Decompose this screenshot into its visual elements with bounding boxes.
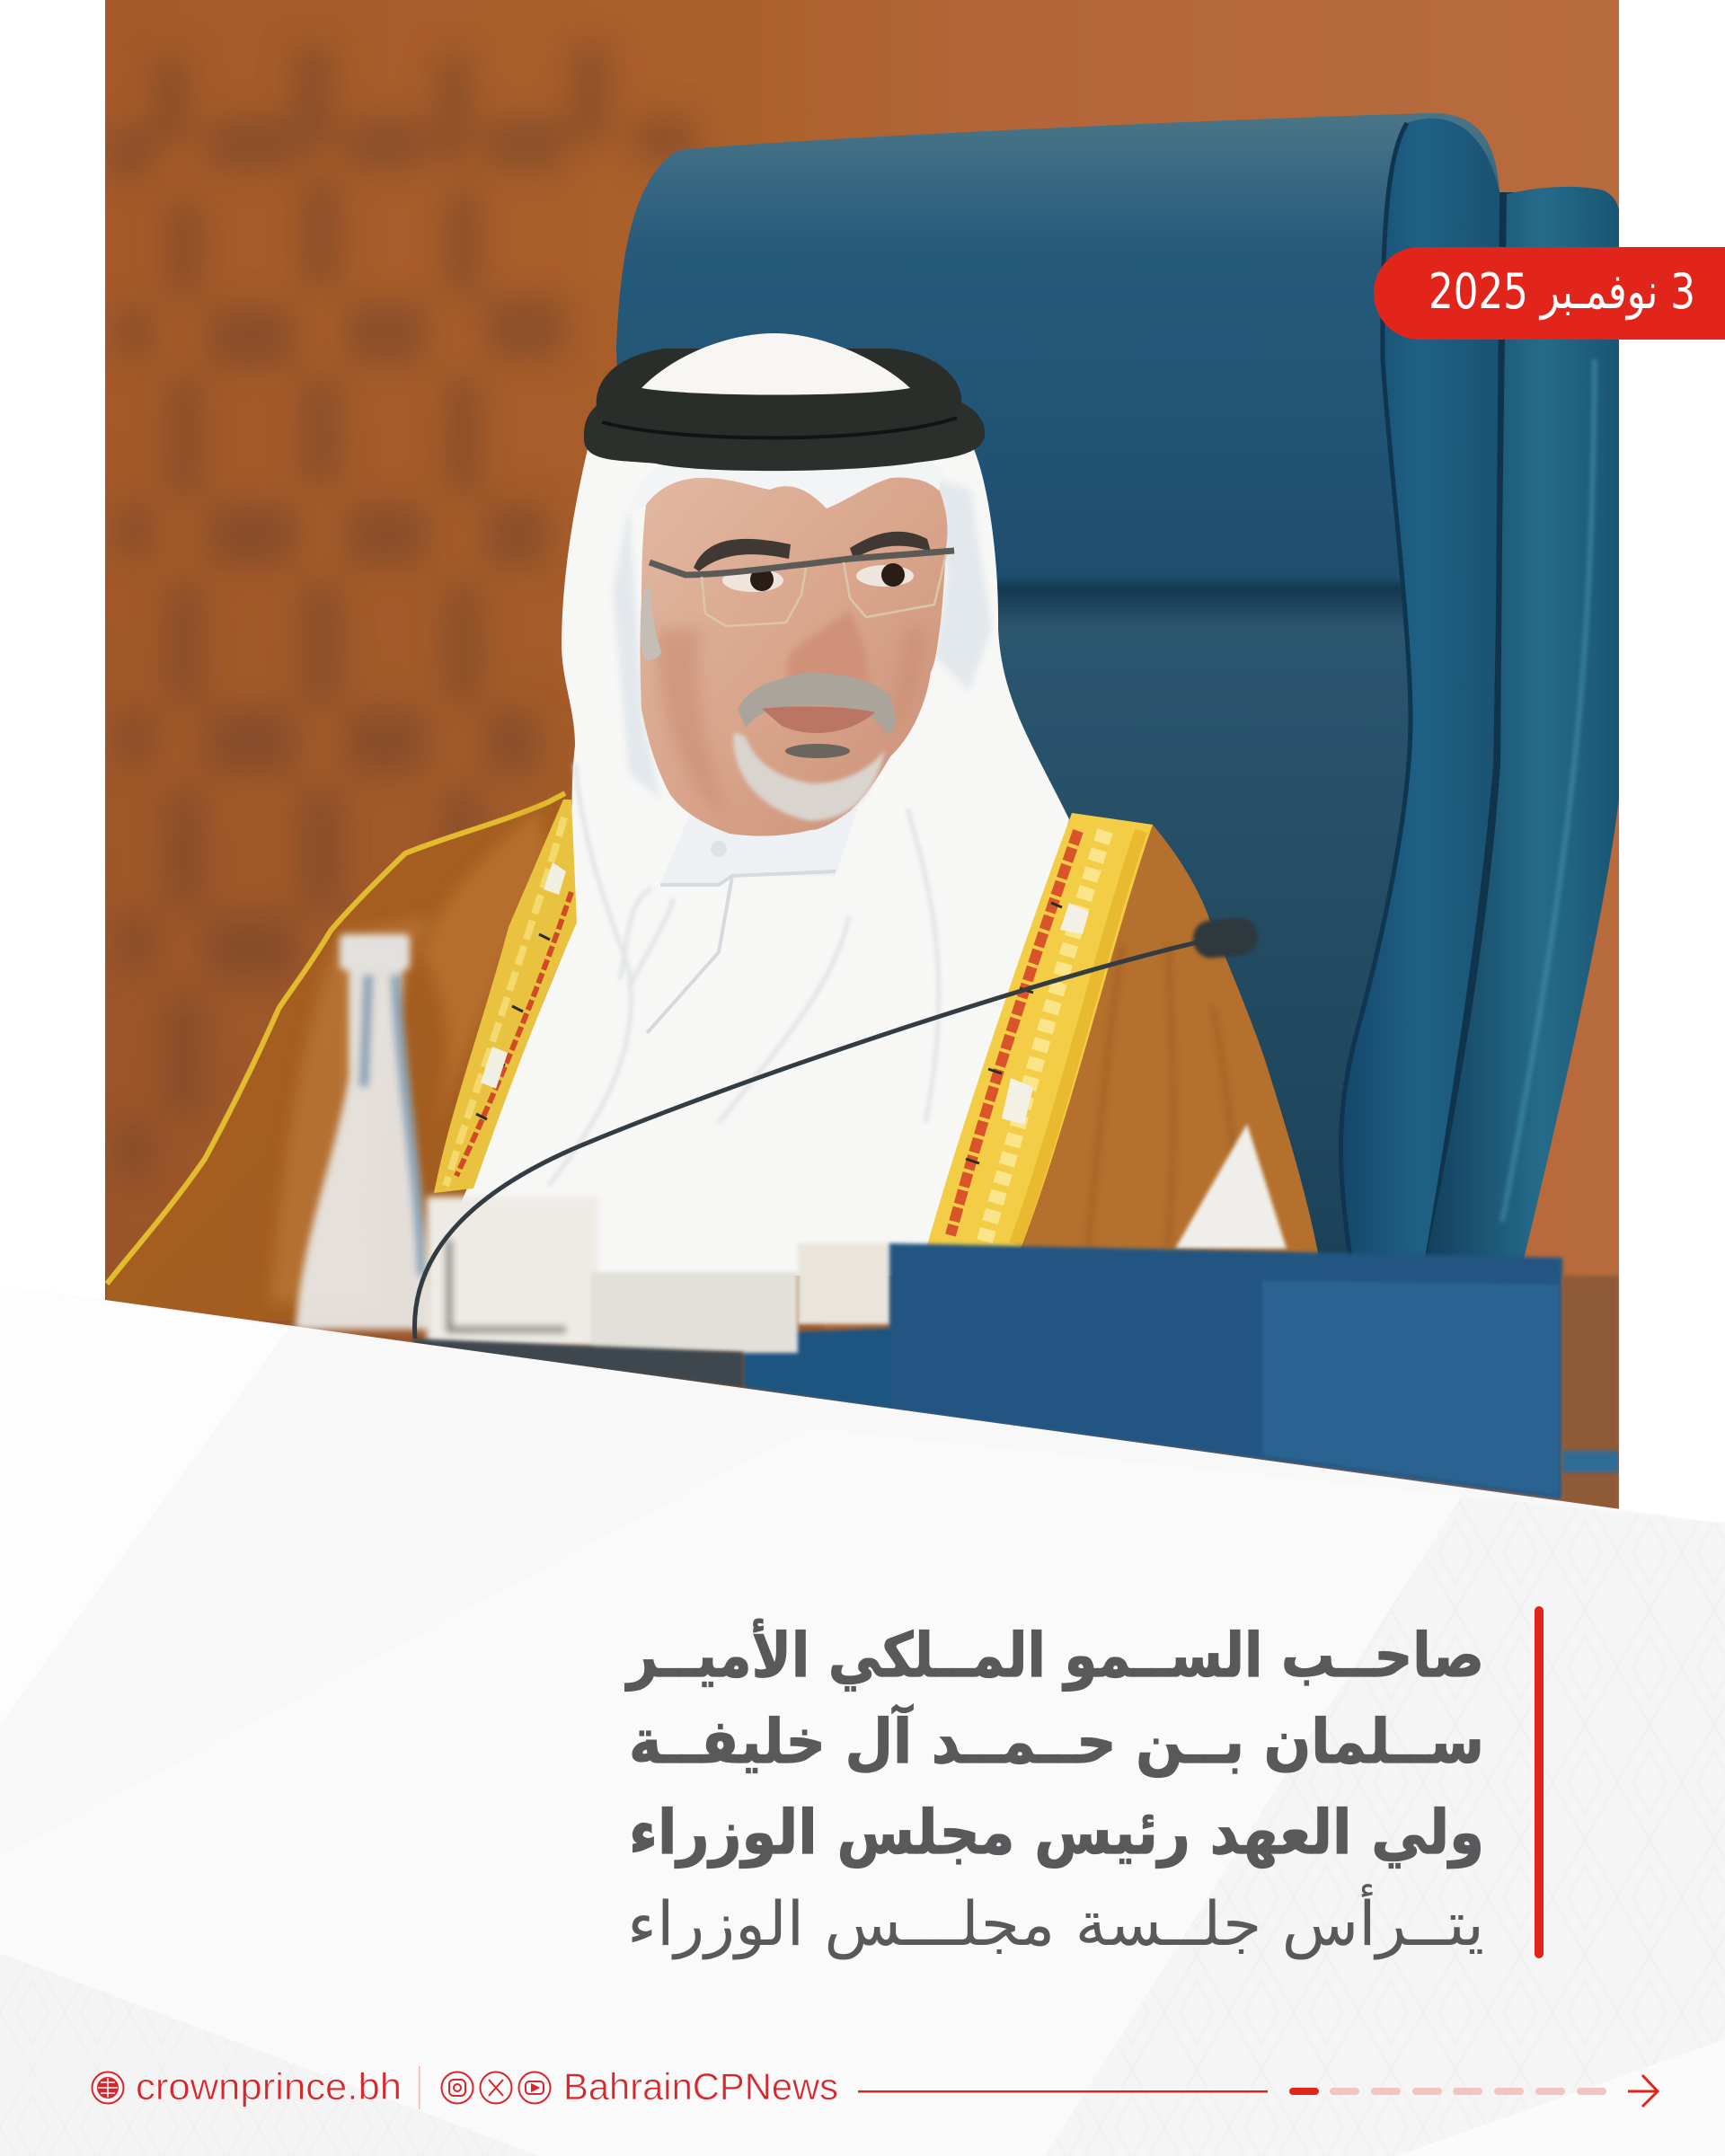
facet: right xyxy=(1045,1496,1725,2156)
handle: BahrainCPNews xyxy=(563,2065,838,2107)
right eye xyxy=(856,563,914,587)
cheek shading xyxy=(656,629,925,817)
robe: thobe and ghutra white xyxy=(431,449,1069,1276)
chair: seam xyxy=(1341,123,1411,1258)
table: small cup xyxy=(798,1243,891,1324)
tray xyxy=(413,1339,743,1388)
right eyebrow xyxy=(850,532,931,559)
face xyxy=(640,478,954,836)
agal upper ring xyxy=(597,349,961,437)
soul patch xyxy=(785,744,850,758)
nostril line xyxy=(789,685,864,702)
robe: right shoulder folds xyxy=(1087,943,1244,1249)
headline: ولي العهد رئيس مجلس الوزراء xyxy=(629,1798,1484,1869)
water bottle xyxy=(296,934,433,1330)
agal lower ring xyxy=(584,395,985,471)
date badge: 3 نوفمـبر 2025 xyxy=(1429,263,1695,320)
tissue box xyxy=(743,1243,1562,1500)
keffiyeh dome xyxy=(641,333,910,395)
wall panelling xyxy=(105,0,1619,1527)
chair: far wing xyxy=(1424,187,1620,1267)
robe: left shoulder xyxy=(107,793,575,1321)
inner ghutra shade xyxy=(613,476,992,800)
headline xyxy=(624,1618,1484,1960)
date badge xyxy=(1374,247,1725,340)
moustache xyxy=(738,672,896,735)
headline: يتــرأس جلــسة مجلـــس الوزراء xyxy=(627,1884,1484,1960)
nose xyxy=(787,611,868,701)
red accent bar xyxy=(1535,1606,1544,1958)
forehead fold xyxy=(629,451,943,512)
chair: gap shadow xyxy=(1425,192,1514,1258)
temple hair xyxy=(641,584,661,660)
icon: x xyxy=(480,2072,512,2104)
chair: highlight xyxy=(1502,359,1595,1222)
blue stripe right xyxy=(1562,1451,1619,1472)
facet: bottom left xyxy=(0,1953,539,2156)
footer line xyxy=(858,2090,1268,2093)
goatee xyxy=(733,732,885,821)
facet: centre band xyxy=(0,1428,1462,2156)
cup xyxy=(591,1272,798,1353)
collar xyxy=(647,808,858,1033)
left eyebrow xyxy=(694,539,791,571)
robe: gold left band xyxy=(434,800,577,1193)
background photo xyxy=(105,0,1620,1527)
tissue triangle xyxy=(1175,1124,1287,1249)
icon: globe xyxy=(92,2072,124,2104)
chair: back cushion xyxy=(616,113,1499,1258)
facet: right pattern xyxy=(1045,1496,1725,2156)
chair: side band xyxy=(1341,119,1499,1258)
wood table right xyxy=(1562,1276,1619,1518)
lower white panel xyxy=(0,1286,1725,2156)
robe: gold right band xyxy=(926,813,1153,1249)
headline: صاحــب الســمو المــلكي الأميــر xyxy=(624,1618,1484,1692)
footer website: crownprince.bh xyxy=(136,2065,402,2107)
microphone stem xyxy=(414,939,1213,1339)
headline: ســلمان بــن حــمــد آل خليفــة xyxy=(629,1703,1484,1778)
robe: lit fold near band xyxy=(424,808,546,1083)
glasses xyxy=(650,551,954,626)
facet: bottom left pattern xyxy=(0,1953,539,2156)
left eye xyxy=(722,568,783,592)
glass xyxy=(427,1197,598,1348)
icon: instagram xyxy=(442,2072,473,2104)
agal texture xyxy=(602,418,957,437)
robe: sleeve shading xyxy=(270,916,431,1303)
microphone head xyxy=(1191,916,1260,959)
arrow xyxy=(1628,2075,1658,2107)
social icons xyxy=(442,2072,550,2104)
lips xyxy=(762,706,875,733)
footer divider xyxy=(419,2066,420,2109)
pagination dashes xyxy=(1289,2088,1606,2095)
facet: bottom right xyxy=(1397,2039,1725,2156)
robe: right shoulder xyxy=(1022,813,1319,1256)
robe: gold edge xyxy=(107,793,565,1284)
facet: upper left xyxy=(0,1286,289,1725)
icon: youtube xyxy=(519,2072,550,2104)
ghutra folds xyxy=(548,764,939,1186)
